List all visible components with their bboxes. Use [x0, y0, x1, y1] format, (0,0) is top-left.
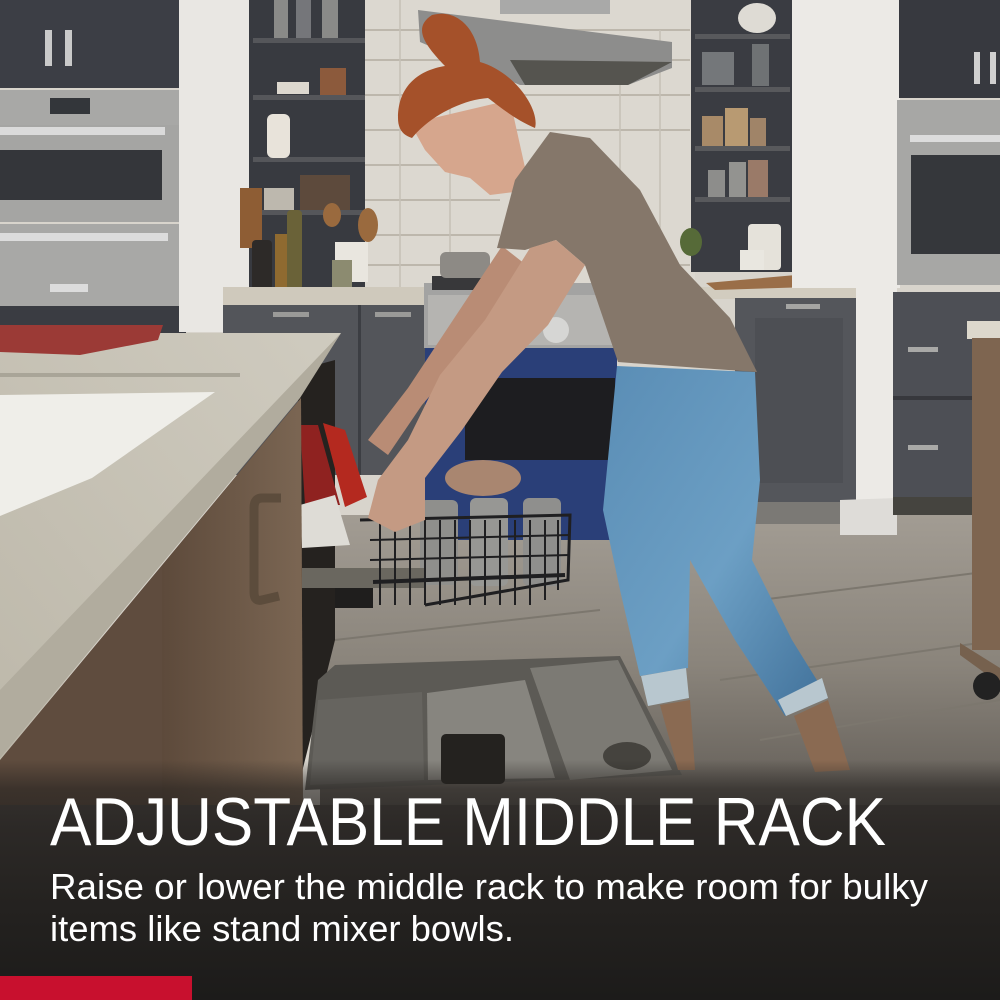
- left countertop back and cabinets: [223, 287, 427, 475]
- utensils and bottles on counter: [240, 188, 378, 290]
- red plates in rack: [300, 423, 367, 548]
- white column right: [792, 0, 900, 535]
- right counter and cabinet: [700, 272, 862, 524]
- right shelves: [680, 0, 793, 272]
- glasses and bowl in rack: [420, 460, 561, 586]
- island countertop: [0, 325, 341, 760]
- woman: jeans: [603, 366, 850, 772]
- bottom dark gradient panel: [0, 760, 1000, 1000]
- red accent bar: [0, 976, 192, 1000]
- wooden cart: [960, 321, 1000, 700]
- title: ADJUSTABLE MIDDLE RACK: [50, 784, 886, 860]
- left wall ovens: [0, 0, 186, 334]
- range hood: [418, 0, 672, 85]
- dishwasher interior and tub: [298, 360, 682, 790]
- range: [424, 252, 619, 540]
- woman: hair: [398, 14, 536, 138]
- right wall oven and cabinets: [893, 0, 1000, 515]
- woman: neck and face: [415, 100, 530, 195]
- woman: t-shirt: [497, 132, 757, 372]
- woman: back arm: [368, 246, 530, 455]
- description: Raise or lower the middle rack to make room for bulky: [50, 866, 928, 907]
- island wood cabinet: [0, 398, 303, 830]
- left open shelves: [249, 0, 368, 290]
- white column left: [179, 0, 249, 332]
- description: items like stand mixer bowls.: [50, 908, 514, 949]
- description: [50, 866, 928, 949]
- woman: front arm and hand: [368, 240, 585, 532]
- middle dishwasher rack: [302, 515, 570, 608]
- floor: [320, 515, 1000, 815]
